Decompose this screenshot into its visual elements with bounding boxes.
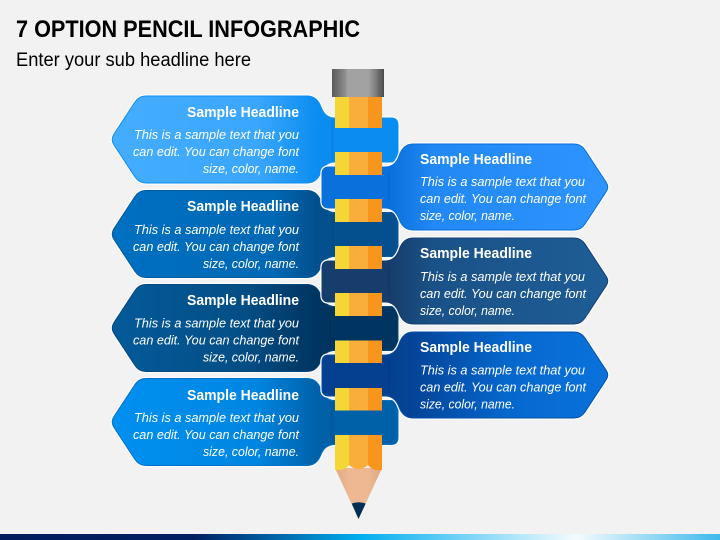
- panel: left option 1: [112, 96, 398, 183]
- panel: left option 4: Sample Headline: [187, 387, 299, 404]
- icon: pencil: [332, 69, 384, 519]
- panel: left option 4: [112, 378, 398, 466]
- panel: left option 4: can edit. You can change font: [133, 427, 300, 442]
- pencil eraser cap: [332, 69, 384, 97]
- panel: left option 1: Sample Headline: [187, 104, 299, 121]
- panel: left option 1: size, color, name.: [203, 161, 299, 176]
- panel: right option 3: This is a sample text that you: [420, 362, 585, 378]
- panel: right option 3: [322, 332, 608, 418]
- panel: left option 1: This is a sample text that you: [134, 127, 299, 142]
- panel: right option 1: Sample Headline: [420, 151, 532, 168]
- panel: right option 3: size, color, name.: [420, 396, 515, 412]
- panel: left option 2: [112, 190, 398, 278]
- pencil wood tip: [335, 468, 382, 519]
- panel: left option 3: [112, 284, 398, 372]
- panel: left option 3: This is a sample text that you: [134, 316, 299, 330]
- panel: right option 1: can edit. You can change font: [420, 191, 587, 206]
- panel: right option 1: This is a sample text that you: [420, 174, 585, 189]
- subtitle: Enter your sub headline here: [16, 50, 251, 71]
- panel: right option 3: can edit. You can change font: [420, 380, 587, 394]
- panel: left option 2: Sample Headline: [187, 198, 299, 215]
- pencil lead: [352, 502, 366, 519]
- panel: left option 4: size, color, name.: [203, 444, 299, 459]
- panel: left option 1: can edit. You can change font: [133, 144, 300, 159]
- panel: left option 3: size, color, name.: [203, 350, 299, 364]
- panel: left option 3: can edit. You can change font: [133, 332, 300, 348]
- pencil body segments: [335, 97, 382, 410]
- panel: right option 1: [322, 144, 608, 230]
- panel: right option 2: can edit. You can change font: [420, 286, 587, 301]
- panel: left option 2: can edit. You can change font: [133, 239, 300, 254]
- pencil lower body with scalloped edge: [335, 435, 382, 470]
- footer gradient bar: [0, 534, 720, 540]
- panel: right option 2: This is a sample text that you: [420, 269, 585, 284]
- panel: left option 4: This is a sample text that you: [134, 410, 299, 425]
- panel: left option 3: Sample Headline: [187, 292, 299, 309]
- panel: right option 2: size, color, name.: [420, 303, 515, 318]
- panel: right option 2: [322, 238, 608, 324]
- panel: right option 1: size, color, name.: [420, 208, 515, 223]
- panel: right option 3: Sample Headline: [420, 339, 532, 356]
- panel: right option 2: Sample Headline: [420, 245, 532, 262]
- title: 7 OPTION PENCIL INFOGRAPHIC: [16, 16, 360, 43]
- panel: left option 2: This is a sample text that you: [134, 222, 299, 237]
- panel: left option 2: size, color, name.: [203, 256, 299, 271]
